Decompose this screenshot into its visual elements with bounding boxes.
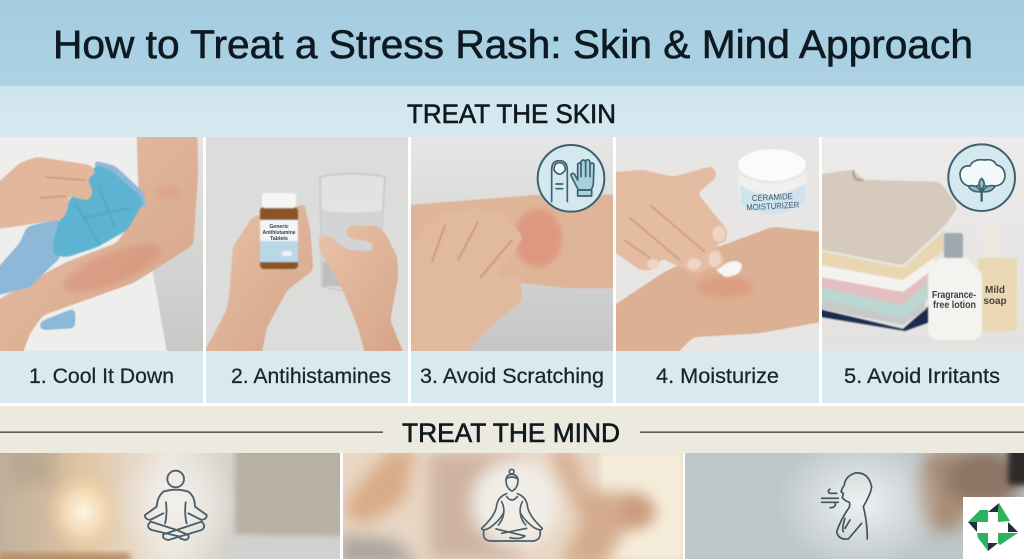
photo: hand scratching arm [411,137,613,351]
blurred photo background [685,453,1024,559]
label: 2. Antihistamines [231,365,391,388]
heading: treat the skin [0,86,1024,137]
panel: yoga [340,450,683,559]
label [822,351,1024,403]
label: 4. Moisturize [656,365,779,388]
photo: clothes and bottles: Fragrance- [932,289,976,301]
photo: pill bottle and water glass: Antihistamine [262,230,296,236]
label [0,351,203,403]
icon: yoga figure [482,469,542,541]
photo: clothes and bottles: soap [983,296,1007,307]
heading: treat the skin: TREAT THE SKIN [407,99,616,129]
label: 5. Avoid Irritants [844,365,1000,388]
photo: clothes and bottles: Mild [985,285,1005,296]
panel: avoid irritants [815,137,1024,403]
title banner [0,0,1024,86]
icon: cotton plant [948,144,1015,211]
photo: pill bottle and water glass [200,137,408,360]
photo: ice pack on arm [0,130,203,360]
label: 1. Cool It Down [29,365,174,388]
photo: pill bottle and water glass: Generic [269,224,289,230]
blurred photo background [0,453,340,559]
photo: applying moisturizer [616,137,819,351]
icon: breath profile [822,473,872,539]
photo: applying moisturizer: CERAMIDE [752,191,793,203]
panel: meditation [0,453,340,559]
label: 3. Avoid Scratching [420,365,604,388]
heading: treat the mind [0,406,1024,453]
panel: antihistamines [200,137,408,403]
heading: treat the mind: TREAT THE MIND [402,418,620,448]
label [411,351,613,403]
panel: breathing [685,453,1024,559]
logo [963,497,1024,559]
blurred photo background [340,450,683,559]
panel: avoid scratching [411,137,613,403]
panel: cool it down [0,130,203,403]
label [206,351,408,403]
label [616,351,819,403]
panel: moisturize [616,137,819,403]
icon: fingernail and glove [538,145,604,212]
photo: pill bottle and water glass: Tablets [270,236,288,242]
icon: seated figure [145,471,207,540]
photo: applying moisturizer: MOISTURIZER [746,200,800,212]
photo: clothes and bottles: free lotion [933,299,976,311]
title banner: How to Treat a Stress Rash: Skin & Mind Approach [53,23,973,67]
photo: clothes and bottles [815,137,1024,351]
